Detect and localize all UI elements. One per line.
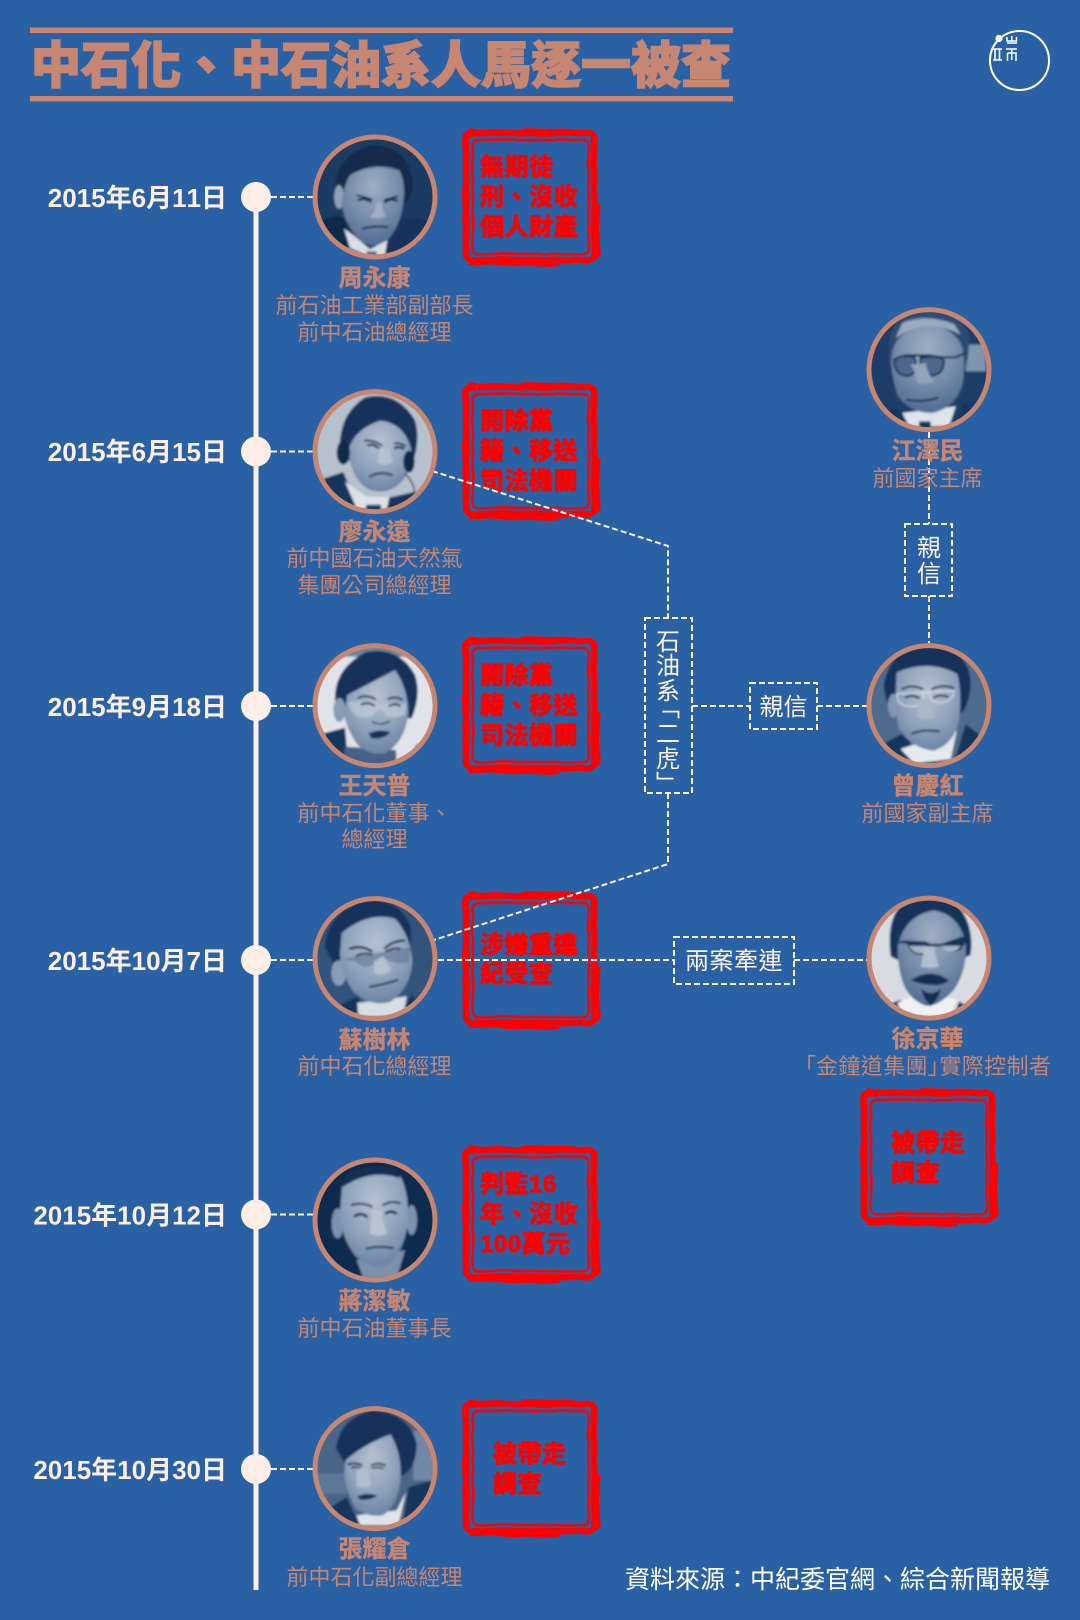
portrait: 蘇樹林 [312, 896, 438, 1022]
stamp text: 廖永遠: 籍、移送 [480, 438, 578, 465]
name: 張耀倉 [286, 1535, 463, 1590]
portrait: 蔣潔敏 [312, 1158, 438, 1282]
name: 王天普: 王天普 [338, 773, 410, 800]
name: 徐京華: 徐京華 [892, 1026, 964, 1053]
stamp text: 張耀倉: 被帶走 [493, 1441, 566, 1468]
name: 蔣潔敏: 前中石油董事長 [297, 1316, 452, 1341]
timeline row 1: 2015年6月11日 [48, 183, 227, 213]
label: 石油系二虎 [645, 618, 692, 798]
name: 曾慶紅: 前國家副主席 [861, 801, 994, 826]
label: 石油系二虎: 石 [656, 629, 680, 656]
name: 徐京華: 「金鐘道集團」實際控制者 [805, 1054, 1051, 1079]
stamp text: 蘇樹林: 紀受查 [480, 961, 554, 988]
portrait: 張耀倉 [312, 1406, 438, 1532]
stamp text: 廖永遠: 開除黨 [480, 408, 554, 435]
portrait: 廖永遠 [312, 389, 438, 514]
stamp text: 蘇樹林 [480, 932, 578, 988]
stamp text: 周永康 [480, 153, 578, 241]
label: 親信 vertical: 親 [917, 535, 941, 562]
label: 石油系二虎: ﹁ [656, 695, 680, 722]
label: 石油系二虎: 虎 [656, 746, 680, 773]
name: 廖永遠 [286, 518, 463, 598]
stamp text: 周永康: 刑、沒收 [480, 184, 578, 211]
portrait: 王天普 [312, 643, 438, 768]
label: 石油系二虎: 油 [656, 653, 680, 680]
portrait: 曾慶紅 [866, 643, 992, 768]
stamp: 廖永遠 [462, 382, 600, 521]
stamp: 蔣潔敏 [462, 1145, 600, 1284]
portrait: 江澤民 [866, 307, 992, 432]
name: 廖永遠: 前中國石油天然氣 [286, 546, 463, 571]
label: 石油系二虎: 二 [656, 721, 680, 748]
stamp text: 蔣潔敏: 100萬元 [480, 1231, 571, 1258]
label: 親信 horizontal [750, 683, 817, 729]
stamp: 王天普 [462, 636, 600, 775]
name: 周永康 [275, 265, 474, 345]
label: 親信 vertical [905, 524, 952, 596]
name: 江澤民: 前國家主席 [872, 466, 983, 491]
name: 張耀倉: 張耀倉 [338, 1535, 410, 1563]
stamp text: 王天普 [480, 662, 578, 750]
label: 石油系二虎: 系 [656, 678, 680, 705]
name: 王天普: 總經理 [341, 827, 408, 852]
stamp text: 廖永遠: 司法機關 [480, 468, 578, 495]
name: 周永康: 前石油工業部副部長 [275, 293, 474, 318]
name: 王天普: 前中石化董事、 [297, 801, 452, 826]
name: 江澤民: 江澤民 [892, 438, 964, 465]
label: 石油系二虎: ﹂ [656, 771, 680, 798]
label: 兩案牽連 [674, 937, 794, 984]
name: 曾慶紅: 曾慶紅 [892, 773, 964, 800]
stamp text: 周永康: 個人財產 [480, 213, 578, 241]
stamp text: 徐京華: 被帶走 [891, 1130, 964, 1157]
stamp text: 廖永遠 [480, 408, 578, 495]
portrait: 周永康 [312, 134, 438, 260]
stamp text: 蘇樹林: 涉嫌重違 [480, 932, 578, 959]
name: 廖永遠: 廖永遠 [338, 518, 410, 546]
name: 江澤民 [872, 438, 983, 491]
name: 蘇樹林: 蘇樹林 [338, 1027, 410, 1054]
name: 曾慶紅 [861, 773, 994, 826]
name: 蔣潔敏 [297, 1288, 452, 1341]
stamp text: 周永康: 無期徒 [480, 153, 554, 181]
stamp text: 張耀倉 [493, 1441, 566, 1498]
source note: 資料來源：中紀委官網、綜合新聞報導 [625, 1566, 1050, 1594]
stamp text: 蔣潔敏: 判監16 [480, 1171, 557, 1198]
stamp text: 蔣潔敏 [480, 1171, 578, 1258]
stamp: 周永康 [462, 128, 600, 267]
timeline row 6: 2015年10月30日 [33, 1455, 227, 1485]
timeline row 4: 2015年10月7日 [48, 946, 227, 976]
stamp text: 王天普: 開除黨 [480, 662, 554, 690]
stamp: 蘇樹林 [462, 891, 600, 1030]
name: 王天普 [297, 773, 452, 852]
name: 周永康: 前中石油總經理 [297, 320, 452, 345]
name: 蘇樹林 [297, 1027, 452, 1079]
connector lines [271, 197, 929, 1469]
stamp text: 張耀倉: 調查 [493, 1471, 542, 1498]
stamp text: 蔣潔敏: 年、沒收 [480, 1201, 578, 1228]
timeline row 3: 2015年9月18日 [48, 692, 227, 722]
label: 親信 horizontal: 親信 [760, 694, 808, 721]
stamp: 徐京華 [860, 1088, 998, 1227]
name: 蔣潔敏: 蔣潔敏 [338, 1288, 410, 1315]
timeline row 5: 2015年10月12日 [33, 1200, 227, 1230]
stamp text: 徐京華: 調查 [891, 1160, 940, 1187]
label: 兩案牽連: 兩案牽連 [685, 948, 783, 975]
name: 徐京華 [805, 1026, 1051, 1079]
name: 蘇樹林: 前中石化總經理 [297, 1054, 452, 1079]
icon: logo [990, 31, 1049, 90]
portrait: 徐京華 [866, 896, 992, 1021]
label: 親信 vertical: 信 [917, 561, 941, 588]
title: 中石化、中石油系人馬逐一被查 [31, 38, 731, 94]
stamp text: 王天普: 司法機關 [480, 722, 578, 750]
name: 張耀倉: 前中石化副總經理 [286, 1565, 463, 1590]
stamp: 張耀倉 [462, 1399, 600, 1538]
timeline axis [254, 197, 258, 1590]
name: 周永康: 周永康 [338, 265, 410, 292]
stamp text: 王天普: 籍、移送 [480, 692, 578, 720]
name: 廖永遠: 集團公司總經理 [297, 573, 452, 598]
timeline row 2: 2015年6月15日 [48, 437, 227, 467]
stamp text: 徐京華 [891, 1130, 964, 1187]
